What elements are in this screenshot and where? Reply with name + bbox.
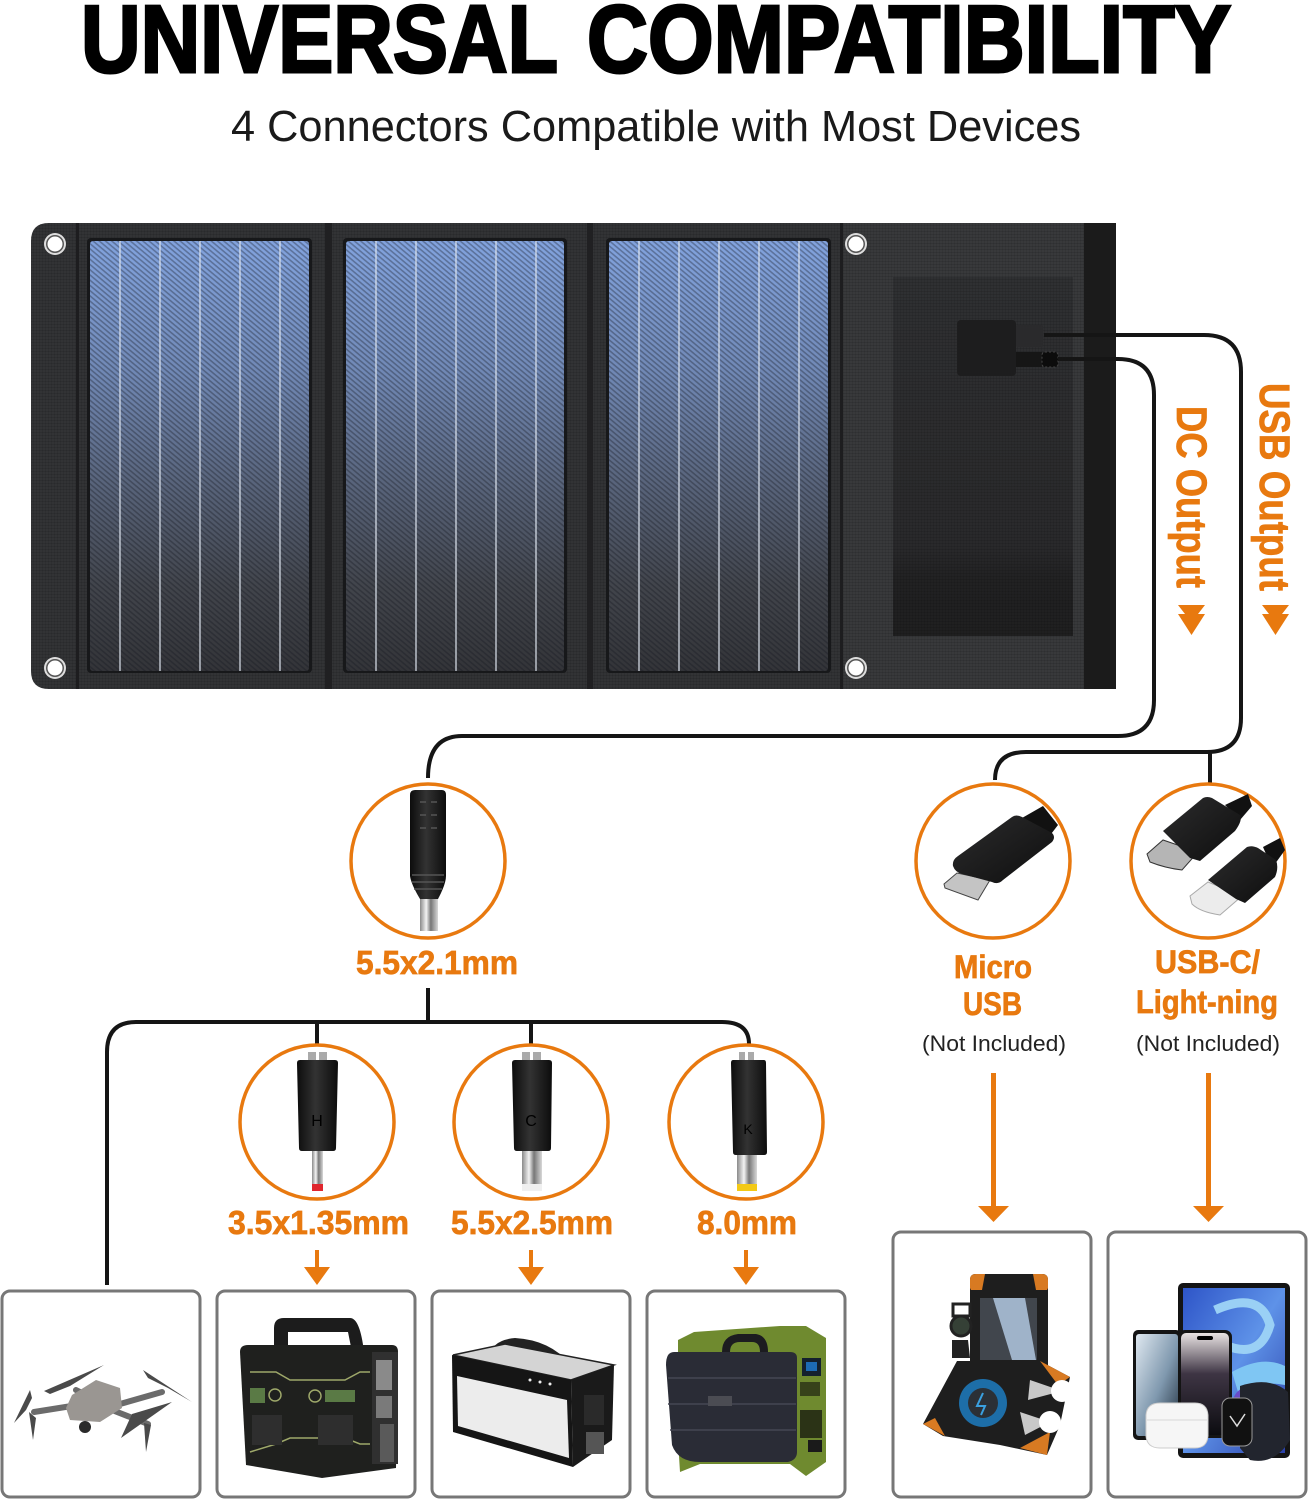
device: solar power bank — [893, 1232, 1091, 1497]
icon: USB double arrow — [1262, 605, 1289, 635]
cable: DC output — [428, 359, 1154, 778]
connector: USB-C and Lightning — [1131, 784, 1285, 938]
connector: Micro USB — [916, 784, 1070, 938]
junction box — [957, 320, 1058, 376]
label: Micro USB: Micro — [954, 949, 1032, 985]
label: 3.5x1.35mm: 3.5x1.35mm — [228, 1204, 409, 1241]
label: 8.0mm: 8.0mm — [697, 1204, 797, 1241]
icon: DC double arrow — [1178, 605, 1205, 635]
cable: DC branches — [107, 988, 749, 1285]
connector: 8.0mm: K — [743, 1121, 753, 1137]
label: USB-C/ Lightning: (Not Included) — [1136, 1031, 1280, 1056]
connector: 8.0mm — [669, 1045, 823, 1199]
title — [81, 0, 1231, 93]
pocket — [893, 277, 1073, 636]
label: Micro USB: (Not Included) — [922, 1031, 1066, 1056]
arrow: Micro USB — [978, 1073, 1009, 1222]
connector: 5.5x2.5mm — [454, 1045, 608, 1199]
solar cell 2 — [343, 238, 567, 673]
solar cell 1 — [87, 238, 312, 673]
label: USB-C/ Lightning: USB-C/ — [1155, 944, 1260, 980]
solar panel — [31, 223, 1116, 689]
grommets — [44, 233, 867, 679]
arrow — [518, 1250, 544, 1285]
connector: 5.5x2.1mm — [351, 784, 505, 938]
label: DC Output: DC Output — [1167, 406, 1215, 588]
device: drone — [2, 1291, 200, 1497]
label: Micro USB — [922, 949, 1066, 1056]
connector: 5.5x2.5mm: C — [525, 1113, 537, 1130]
label: Micro USB: USB — [963, 986, 1022, 1022]
solar cell 3 — [606, 238, 831, 673]
connector: 3.5x1.35mm — [240, 1045, 394, 1199]
label: USB Output: USB Output — [1250, 383, 1298, 591]
connector: 3.5x1.35mm: H — [311, 1113, 323, 1130]
subtitle: 4 Connectors Compatible with Most Devices — [231, 102, 1081, 151]
label: USB-C/ Lightning — [1136, 944, 1280, 1056]
label: USB-C/ Lightning: Light-ning — [1136, 984, 1278, 1020]
arrow — [304, 1250, 330, 1285]
device: tablet phones earbuds watch — [1108, 1232, 1306, 1497]
arrow — [733, 1250, 759, 1285]
device: power station black — [217, 1291, 415, 1497]
label: 5.5x2.5mm: 5.5x2.5mm — [451, 1204, 613, 1241]
device: power station silver — [432, 1291, 630, 1497]
arrow: USB-C — [1193, 1073, 1224, 1222]
device: power station green — [647, 1291, 845, 1497]
cable: USB output — [995, 335, 1241, 784]
label: 5.5x2.1mm: 5.5x2.1mm — [356, 944, 518, 981]
velcro strip — [1084, 223, 1116, 689]
